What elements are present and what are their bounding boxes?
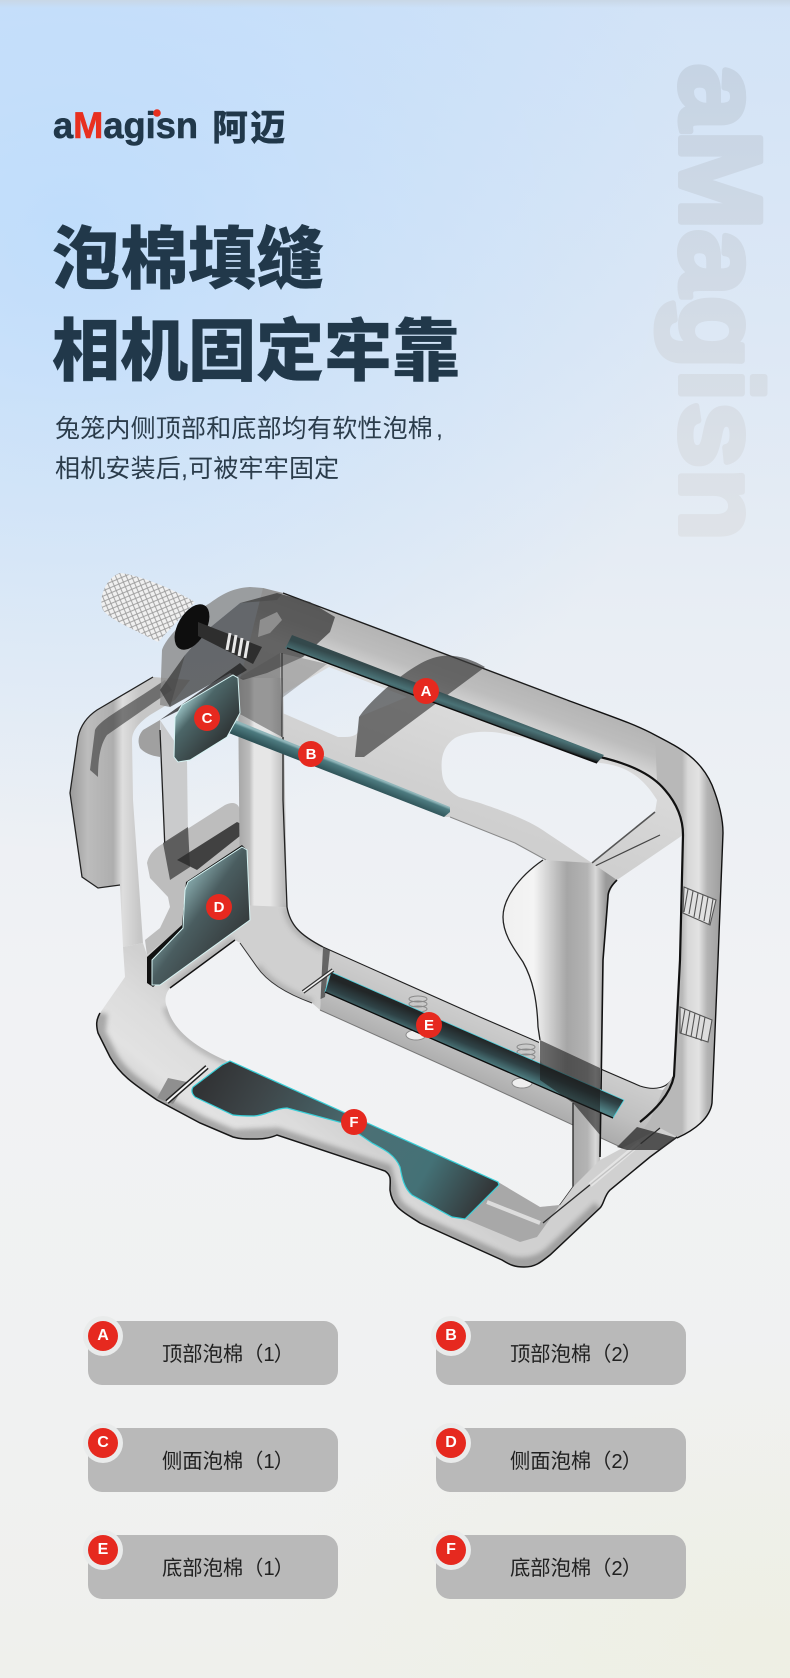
right side screws <box>680 887 716 1042</box>
badge E <box>416 1012 442 1038</box>
right vertical bar <box>567 700 723 1152</box>
grip and vertical band <box>503 860 617 1230</box>
product illustration: transparent camera cage <box>69 573 724 1268</box>
badge B: B <box>306 746 317 763</box>
badge C: C <box>202 710 213 727</box>
badge B <box>298 741 324 767</box>
foam pad B <box>216 715 450 817</box>
legend B <box>436 1321 686 1385</box>
legend D: D <box>445 1434 457 1451</box>
logo: aMagisn 阿迈: aMagisn <box>53 105 198 146</box>
legend D <box>436 1428 686 1492</box>
legend E <box>88 1535 338 1599</box>
foam pad C <box>174 675 240 762</box>
logo: aMagisn 阿迈 <box>53 105 288 148</box>
legend D: 侧面泡棉（2） <box>510 1451 642 1473</box>
front frame <box>97 678 677 1267</box>
left inner strip <box>160 720 188 893</box>
legend F: F <box>446 1541 456 1558</box>
rear bottom strip <box>312 947 680 1150</box>
legend C: 侧面泡棉（1） <box>162 1451 294 1473</box>
legend E: E <box>98 1541 108 1558</box>
badge F: F <box>349 1114 359 1131</box>
left outer column <box>70 677 190 947</box>
foam pad A <box>285 635 604 763</box>
description text <box>55 415 443 483</box>
rear screws in strip <box>406 996 535 1088</box>
badge D <box>206 894 232 920</box>
legend C: C <box>97 1434 109 1451</box>
legend E: 底部泡棉（1） <box>162 1558 294 1580</box>
dark upper cap of cage <box>160 587 335 737</box>
badge F <box>341 1109 367 1135</box>
description text: 兔笼内侧顶部和底部均有软性泡棉, <box>55 415 443 443</box>
badge C <box>194 705 220 731</box>
watermark: aMagisn vertical: aMagisn <box>656 64 784 541</box>
legend F <box>436 1535 686 1599</box>
title: 泡棉填缝 <box>52 222 324 298</box>
legend A <box>88 1321 338 1385</box>
legend C <box>88 1428 338 1492</box>
raised step on top face <box>355 656 485 757</box>
legend B: 顶部泡棉（2） <box>510 1344 642 1366</box>
title: 相机固定牢靠 <box>52 314 460 390</box>
foam pad F <box>192 1061 499 1219</box>
badge A: A <box>421 683 432 700</box>
foam pad E <box>325 972 624 1135</box>
logo: aMagisn 阿迈: 阿迈 <box>212 107 288 148</box>
description text: 相机安装后,可被牢牢固定 <box>55 455 339 483</box>
badge E: E <box>424 1017 434 1034</box>
badge A <box>413 678 439 704</box>
top face of cage with two openings <box>216 588 690 880</box>
legend B: B <box>445 1327 457 1344</box>
foam pad D <box>147 845 250 987</box>
legend A: 顶部泡棉（1） <box>162 1344 294 1366</box>
title <box>52 222 460 390</box>
legend A: A <box>97 1327 109 1344</box>
mounting pins <box>157 970 333 1104</box>
legend F: 底部泡棉（2） <box>510 1558 642 1580</box>
bracket behind pad D <box>145 803 250 955</box>
thumb screw <box>101 573 262 664</box>
badge D: D <box>214 899 225 916</box>
